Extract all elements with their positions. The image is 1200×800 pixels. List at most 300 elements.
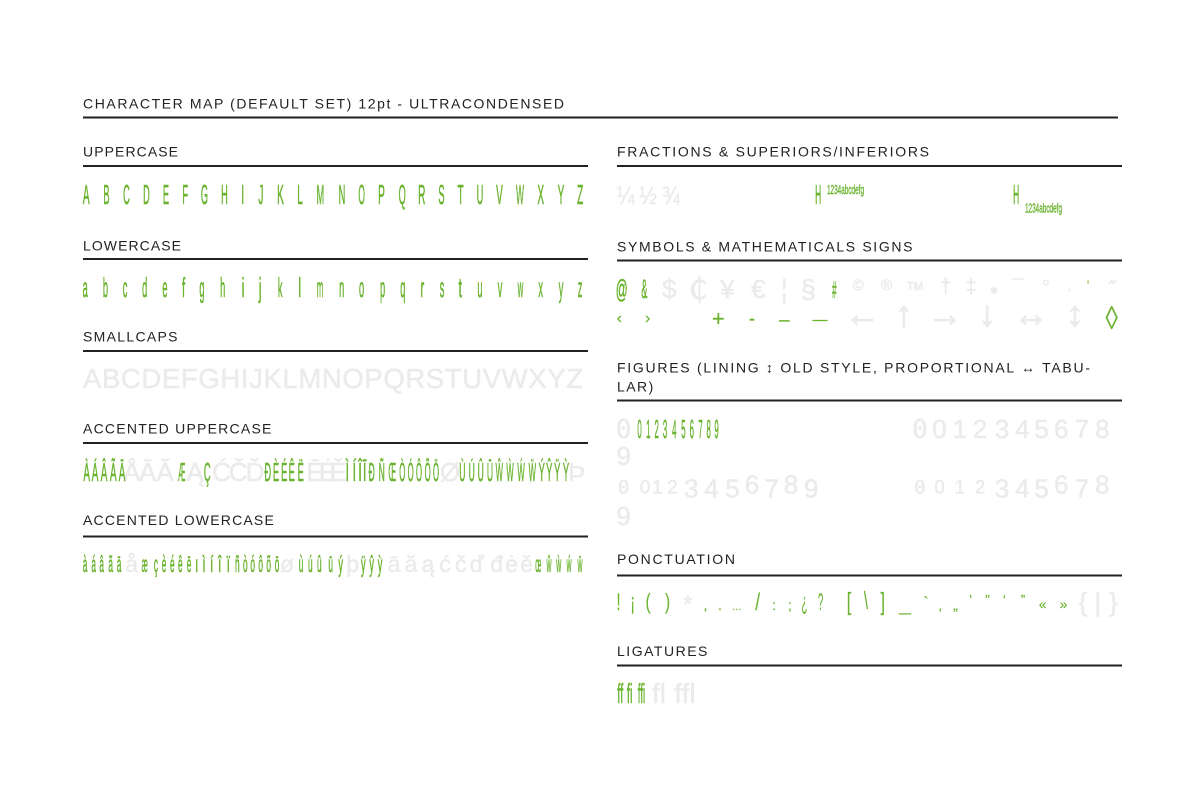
- green punctuation: `: [923, 595, 929, 612]
- green punctuation: ]: [881, 589, 885, 616]
- glyph row: lowercase: j: [258, 271, 262, 303]
- gray figures old style proportional: 4: [704, 474, 719, 504]
- green figures: 5: [681, 416, 686, 445]
- gray figures old style tabular: 7: [1075, 474, 1089, 504]
- green glyphs: accented uppercase: Ú: [469, 457, 475, 488]
- green punctuation: ¡: [630, 589, 635, 616]
- green glyphs: accented lowercase: ÿ: [361, 551, 366, 577]
- green superior sample: H: [815, 180, 821, 211]
- green punctuation: .: [718, 597, 722, 613]
- glyph row: uppercase: T: [458, 180, 464, 211]
- green glyphs: accented uppercase: Ó: [408, 458, 414, 488]
- glyph row: lowercase: p: [380, 273, 385, 304]
- green glyphs: accented uppercase: Ŵ: [496, 459, 503, 488]
- green glyphs: accented uppercase: Ī: [363, 458, 367, 487]
- gray ligatures: [652, 678, 696, 709]
- gray figures old style tabular: 6: [1054, 470, 1068, 500]
- glyph row: lowercase: n: [339, 273, 344, 304]
- green punctuation: »: [1060, 596, 1068, 612]
- green punctuation: (: [645, 590, 651, 615]
- glyph row: uppercase: U: [477, 180, 483, 211]
- heading: figures: FIGURES (LINING ↕ OLD STYLE, PROPORTIONAL ↔ TABU-: [617, 360, 1090, 376]
- gray symbols row 1: [662, 272, 1117, 307]
- gray glyphs: accented lowercase: ø: [280, 551, 294, 577]
- gray symbols row 1: °: [1042, 277, 1050, 299]
- green superior sample: [815, 180, 864, 211]
- panel: ligatures: [617, 643, 1122, 710]
- green superior sample: 1234abcdefg: [827, 183, 864, 197]
- gray figures lining tabular: 7: [1075, 414, 1089, 444]
- glyph row: uppercase: L: [297, 180, 303, 211]
- gray figures old style tabular: 5: [1034, 474, 1049, 504]
- gray glyphs: accented uppercase: Ā: [139, 457, 157, 487]
- glyph row: lowercase: m: [317, 272, 323, 304]
- gray symbols row 1: •: [990, 278, 998, 303]
- glyph row: uppercase: P: [378, 180, 385, 211]
- gray figures old style tabular: 0: [934, 478, 945, 498]
- green glyphs: accented lowercase: é: [170, 551, 175, 577]
- green glyphs: accented lowercase: á: [91, 551, 96, 577]
- heading: uppercase: UPPERCASE: [83, 144, 178, 160]
- green punctuation: :: [772, 597, 776, 613]
- glyph row: lowercase: q: [400, 273, 405, 304]
- green glyphs: accented lowercase: ẃ: [566, 552, 572, 577]
- gray fractions: ¾: [662, 181, 680, 209]
- green glyphs: accented uppercase: Î: [358, 458, 363, 487]
- glyph row: uppercase: V: [496, 180, 503, 211]
- green glyphs: accented uppercase: Ð: [369, 458, 375, 488]
- glyph row: lowercase: c: [123, 273, 127, 304]
- green ligatures: ffi: [638, 679, 645, 710]
- green glyphs: accented lowercase: ï: [227, 552, 230, 577]
- glyph row: lowercase: x: [538, 273, 543, 304]
- green glyphs: accented lowercase: í: [210, 552, 213, 577]
- gray figures old style proportional: 2: [667, 478, 678, 498]
- glyph row: uppercase: K: [277, 180, 284, 211]
- gray glyphs: accented uppercase: Ė: [319, 457, 336, 487]
- green glyphs: accented uppercase: Ù: [459, 457, 465, 488]
- green glyphs: accented uppercase: Ñ: [379, 455, 385, 488]
- panel: smallcaps: [83, 328, 588, 394]
- gray figures old style proportional: 7: [764, 474, 779, 504]
- glyph row: lowercase: h: [220, 273, 225, 304]
- green glyphs: accented uppercase: È: [273, 457, 279, 488]
- title: CHARACTER MAP (DEFAULT SET) 12pt - ULTRACONDENSED: [83, 96, 564, 112]
- green glyphs: accented uppercase: Á: [92, 457, 99, 488]
- green glyphs: accented uppercase: Ö: [433, 459, 439, 488]
- glyph row: uppercase: N: [339, 180, 345, 211]
- gray glyphs: accented lowercase: ć: [439, 551, 451, 577]
- green glyphs: accented lowercase: ẁ: [556, 552, 561, 577]
- glyph row: lowercase: y: [559, 273, 564, 304]
- green symbols row 1: &: [641, 275, 648, 305]
- green punctuation: ": [985, 592, 990, 607]
- gray glyphs: accented uppercase: Ć: [212, 457, 231, 487]
- green glyphs: accented uppercase: Ỳ: [563, 457, 569, 488]
- gray figures old style proportional: 5: [725, 474, 740, 504]
- green figures: 0: [637, 416, 642, 445]
- gray glyphs: accented lowercase: đ: [490, 551, 503, 577]
- gray figures lining proportional: 9: [616, 441, 631, 471]
- glyph row: uppercase: F: [182, 180, 188, 211]
- gray figures old style tabular: [914, 470, 1110, 504]
- green figures: 2: [655, 416, 659, 445]
- gray arrows: ↑: [895, 293, 913, 334]
- green glyphs: accented lowercase: ẅ: [577, 552, 583, 577]
- glyph row: uppercase: Y: [558, 180, 564, 211]
- green punctuation: ‘: [1003, 592, 1006, 607]
- glyph row: lowercase: [83, 271, 582, 304]
- gray glyphs: accented uppercase: Ē: [306, 457, 324, 487]
- heading: symbols: SYMBOLS & MATHEMATICALS SIGNS: [617, 238, 912, 254]
- gray glyphs: accented uppercase: Å: [123, 457, 141, 487]
- green figures: 6: [690, 416, 694, 445]
- green glyphs: accented lowercase: ū: [328, 551, 333, 577]
- gray figures old style tabular: 2: [975, 478, 985, 498]
- green punctuation: ‚: [939, 597, 942, 613]
- gray symbols row 1: ©: [853, 277, 864, 294]
- gray punctuation: |: [1094, 587, 1101, 617]
- green punctuation: /: [755, 589, 760, 616]
- green figures: [637, 416, 719, 445]
- green glyphs: accented uppercase: É: [281, 457, 287, 488]
- gray ligatures: fl: [652, 678, 666, 709]
- green glyphs: accented lowercase: è: [162, 551, 166, 577]
- gray figures lining tabular: 6: [1054, 414, 1068, 444]
- gray glyphs: accented lowercase: þ: [346, 551, 359, 577]
- gray arrows: [844, 293, 1084, 334]
- gray figures old style proportional: [616, 470, 818, 531]
- gray punctuation: *: [683, 591, 692, 618]
- green glyphs: accented uppercase: Ý: [539, 457, 545, 488]
- icon: lozenge: ◊: [1106, 301, 1118, 337]
- green punctuation: [616, 587, 1068, 616]
- green glyphs: accented lowercase: õ: [266, 551, 271, 577]
- green glyphs: accented lowercase: ō: [275, 551, 279, 577]
- green inferior sample: [1013, 180, 1062, 216]
- green symbols row 1: @: [616, 276, 628, 304]
- green symbols row 2: +: [712, 306, 725, 331]
- green glyphs: accented lowercase: œ: [535, 552, 541, 577]
- gray symbols row 1: §: [801, 275, 816, 304]
- gray figures old style proportional: 0: [618, 476, 629, 498]
- green glyphs: accented uppercase: Õ: [425, 458, 431, 488]
- gray figures lining tabular: 3: [995, 414, 1009, 444]
- gray glyphs: accented lowercase: ė: [505, 551, 518, 577]
- glyph row: lowercase: u: [477, 273, 482, 304]
- green glyphs: accented lowercase: ŷ: [369, 551, 374, 577]
- green glyphs: accented uppercase: Đ: [264, 458, 271, 488]
- glyph row: uppercase: D: [143, 180, 150, 211]
- gray figures lining tabular: 2: [973, 414, 987, 444]
- gray figures old style tabular: 1: [955, 478, 965, 498]
- gray figures old style proportional: 0: [640, 478, 650, 498]
- gray figures old style tabular: 4: [1015, 474, 1030, 504]
- green figures: 9: [714, 416, 719, 445]
- green glyphs: accented lowercase: û: [317, 551, 322, 577]
- gray glyphs: accented lowercase: ě: [520, 551, 533, 577]
- green figures: 7: [698, 416, 703, 445]
- green punctuation: \: [864, 587, 868, 615]
- glyph row: lowercase: o: [359, 273, 364, 304]
- green glyphs: accented uppercase: [83, 455, 569, 488]
- gray symbols row 1: ₵: [689, 272, 708, 307]
- green glyphs: accented uppercase: Ẁ: [506, 459, 514, 488]
- green punctuation: …: [732, 602, 742, 613]
- gray glyphs: accented uppercase: Þ: [568, 457, 585, 487]
- green punctuation: ;: [788, 597, 792, 613]
- glyph row: lowercase: a: [83, 273, 88, 304]
- gray glyphs: accented lowercase: č: [455, 551, 466, 577]
- green glyphs: accented lowercase: ó: [250, 551, 255, 577]
- green ligatures: [617, 678, 645, 710]
- green punctuation: ?: [818, 588, 823, 615]
- glyph row: uppercase: S: [438, 180, 444, 211]
- green punctuation: _: [898, 596, 911, 615]
- gray symbols row 1: ™: [906, 279, 924, 302]
- green glyphs: accented lowercase: ì: [202, 552, 206, 577]
- green glyphs: accented lowercase: ú: [308, 551, 313, 577]
- gray glyphs: accented lowercase: [125, 551, 533, 577]
- glyph row: lowercase: d: [142, 273, 147, 304]
- gray symbols row 1: ‡: [965, 276, 977, 298]
- gray glyphs: accented uppercase: Ø: [440, 457, 460, 487]
- gray symbols row 1: ¦: [781, 274, 788, 304]
- glyph row: uppercase: C: [123, 180, 130, 211]
- green glyphs: accented uppercase: Ì: [345, 458, 349, 487]
- green glyphs: accented uppercase: Ò: [399, 458, 405, 488]
- glyph row: lowercase: f: [182, 272, 185, 304]
- glyph row: uppercase: B: [103, 180, 110, 211]
- glyph row: uppercase: A: [83, 180, 90, 211]
- green glyphs: accented lowercase: ā: [117, 551, 121, 577]
- green punctuation: „: [953, 597, 958, 613]
- gray figures lining tabular: [912, 414, 1110, 445]
- green symbols row 2: –: [779, 310, 790, 331]
- green glyphs: accented uppercase: Œ: [388, 459, 396, 488]
- panel: figures: [616, 360, 1122, 531]
- green glyphs: accented uppercase: Â: [101, 457, 108, 488]
- gray figures old style tabular: 8: [1095, 470, 1110, 500]
- gray arrows: ↓: [978, 293, 996, 334]
- glyph row: uppercase: Q: [399, 180, 406, 211]
- glyph row: uppercase: H: [221, 180, 228, 211]
- green glyphs: accented uppercase: Æ: [178, 459, 185, 488]
- green symbols row 2: —: [812, 312, 828, 328]
- gray figures lining tabular: 1: [953, 414, 967, 444]
- green glyphs: accented lowercase: ı: [195, 552, 198, 577]
- gray symbols row 1: †: [940, 276, 951, 298]
- green punctuation: !: [616, 589, 621, 616]
- gray glyphs: accented uppercase: Ă: [156, 457, 174, 487]
- gray glyphs: accented uppercase: Č: [229, 457, 248, 487]
- gray symbols row 1: €: [751, 274, 766, 304]
- glyph row: uppercase: X: [537, 180, 544, 211]
- gray figures lining tabular: 8: [1095, 414, 1110, 444]
- green glyphs: accented lowercase: ê: [178, 551, 183, 577]
- gray fractions: ¼: [617, 181, 635, 209]
- gray ligatures: ffl: [674, 678, 696, 709]
- gray figures old style proportional: 8: [784, 470, 798, 500]
- heading: lowercase: LOWERCASE: [83, 238, 181, 254]
- green glyphs: accented uppercase: Ÿ: [554, 458, 560, 488]
- panel: ponctuation: [616, 551, 1122, 618]
- gray glyphs: accented uppercase: Ě: [329, 457, 347, 487]
- panel: accented lowercase: [83, 512, 588, 577]
- green ligatures: ff: [617, 678, 623, 710]
- gray glyphs: accented lowercase: ă: [405, 551, 418, 577]
- glyph row: uppercase: R: [418, 180, 425, 211]
- glyph row: lowercase: z: [578, 273, 582, 304]
- green glyphs: accented uppercase: Í: [352, 458, 356, 487]
- green glyphs: accented uppercase: Ë: [298, 458, 304, 488]
- green symbols row 1: #: [832, 277, 837, 303]
- green symbols row 1: ': [1087, 279, 1089, 294]
- gray figures old style proportional: 6: [745, 470, 759, 500]
- heading: accented lowercase: ACCENTED LOWERCASE: [83, 512, 274, 528]
- gray punctuation: [683, 587, 1118, 618]
- gray symbols row 1: ¥: [719, 274, 735, 304]
- green glyphs: accented uppercase: Ç: [204, 458, 211, 488]
- gray fractions: ½: [639, 181, 657, 209]
- glyph row: lowercase: v: [498, 273, 503, 304]
- glyph row: uppercase: I: [241, 179, 244, 211]
- glyph row: lowercase: b: [103, 273, 108, 304]
- gray figures old style proportional: 9: [804, 474, 818, 504]
- heading: figures: LAR): [617, 378, 653, 394]
- green inferior sample: 1234abcdefg: [1025, 202, 1062, 216]
- green glyphs: accented lowercase: ỳ: [378, 551, 382, 577]
- glyph row: uppercase: M: [317, 180, 324, 211]
- gray symbols row 1: .: [1067, 278, 1071, 294]
- heading: fractions: FRACTIONS & SUPERIORS/INFERIORS: [617, 144, 929, 160]
- heading: smallcaps: SMALLCAPS: [83, 328, 178, 344]
- green glyphs: accented uppercase: Ê: [289, 457, 295, 488]
- heading: figures: [617, 360, 1122, 402]
- gray symbols row 1: ˝: [1108, 277, 1117, 302]
- green figures: 4: [672, 416, 677, 445]
- green glyphs: accented lowercase: ý: [338, 551, 343, 577]
- gray figures old style tabular: 0: [914, 476, 926, 498]
- glyph row: lowercase: g: [199, 273, 205, 304]
- gray arrows: ←: [844, 293, 880, 334]
- green glyphs: accented uppercase: Ã: [110, 456, 117, 488]
- green glyphs: accented uppercase: Ā: [119, 457, 126, 488]
- green figures: 3: [663, 416, 667, 445]
- green glyphs: accented lowercase: ù: [299, 551, 303, 577]
- panel: lowercase: [83, 238, 588, 304]
- gray figures lining tabular: 4: [1015, 414, 1030, 444]
- green glyphs: accented lowercase: ò: [243, 551, 248, 577]
- gray figures lining tabular: 0: [932, 414, 947, 444]
- green symbols row 2: -: [749, 307, 755, 330]
- heading: ponctuation: PONCTUATION: [617, 551, 735, 567]
- gray figures lining tabular: 5: [1034, 414, 1049, 444]
- green glyphs: accented lowercase: ē: [187, 551, 191, 577]
- green glyphs: accented lowercase: î: [217, 552, 222, 577]
- glyph row: uppercase: E: [163, 180, 169, 211]
- green glyphs: accented uppercase: Ẅ: [529, 459, 536, 488]
- gray symbols row 1: ¯: [1012, 277, 1025, 299]
- gray glyphs: accented lowercase: ą: [422, 551, 435, 577]
- gray fractions: [617, 181, 680, 209]
- green glyphs: accented lowercase: ã: [108, 551, 113, 577]
- green figures: 1: [646, 416, 650, 445]
- glyph row: smallcaps: ABCDEFGHIJKLMNOPQRSTUVWXYZ: [83, 363, 583, 394]
- green glyphs: accented lowercase: æ: [142, 552, 148, 577]
- gray arrows: ↔: [1013, 293, 1049, 334]
- glyph row: uppercase: O: [358, 180, 365, 211]
- panel: uppercase: [83, 144, 588, 211]
- green glyphs: accented lowercase: â: [99, 551, 104, 577]
- gray figures lining tabular: 0: [912, 415, 928, 445]
- gray glyphs: accented uppercase: Ą: [186, 457, 204, 487]
- glyph row: lowercase: l: [298, 271, 301, 303]
- gray glyphs: accented lowercase: ď: [470, 551, 485, 577]
- green glyphs: accented lowercase: [83, 551, 583, 577]
- green glyphs: accented uppercase: Ẃ: [517, 459, 525, 488]
- green symbols row 2: ›: [645, 310, 650, 327]
- panel: accented uppercase: [83, 420, 588, 488]
- glyph row: uppercase: Z: [577, 180, 583, 211]
- green punctuation: ”: [1021, 592, 1025, 607]
- gray figures lining proportional: [616, 415, 631, 471]
- glyph row: lowercase: e: [162, 273, 168, 304]
- green glyphs: accented uppercase: Ū: [487, 457, 493, 488]
- glyph row: lowercase: r: [421, 272, 424, 304]
- gray arrows: →: [927, 293, 963, 334]
- gray figures old style proportional: 1: [652, 478, 663, 498]
- green glyphs: accented lowercase: ŵ: [546, 552, 552, 577]
- glyph row: uppercase: W: [516, 180, 524, 211]
- gray glyphs: accented lowercase: å: [125, 551, 138, 577]
- glyph row: lowercase: w: [517, 272, 523, 304]
- green glyphs: accented lowercase: ç: [154, 551, 158, 577]
- gray symbols row 1: ®: [881, 277, 892, 294]
- glyph row: lowercase: s: [440, 273, 444, 304]
- panel: fractions and superiors/inferiors: [617, 144, 1122, 216]
- gray glyphs: accented lowercase: ā: [388, 551, 401, 577]
- gray glyphs: accented uppercase: Ď: [246, 457, 264, 487]
- green punctuation: ): [665, 590, 670, 615]
- glyph row: lowercase: t: [459, 271, 462, 303]
- gray figures lining proportional: 0: [616, 415, 631, 445]
- green symbols row 1: [616, 275, 1089, 305]
- green punctuation: [: [847, 589, 851, 616]
- green glyphs: accented uppercase: Ô: [416, 458, 422, 488]
- glyph row: uppercase: J: [258, 180, 263, 211]
- gray arrows: ↕: [1066, 293, 1084, 334]
- green punctuation: ¿: [801, 588, 807, 615]
- glyph row: lowercase: k: [278, 273, 283, 304]
- gray symbols row 1: $: [662, 274, 677, 304]
- gray glyphs: accented uppercase: [123, 457, 585, 487]
- gray figures old style proportional: 9: [616, 501, 631, 531]
- gray figures old style proportional: 3: [684, 474, 698, 504]
- glyph row: uppercase: [83, 179, 583, 211]
- gray figures old style tabular: 3: [995, 474, 1009, 504]
- green glyphs: accented lowercase: à: [83, 551, 87, 577]
- green figures: 8: [707, 416, 711, 445]
- green glyphs: accented uppercase: À: [83, 457, 90, 488]
- green glyphs: accented lowercase: ô: [258, 551, 263, 577]
- green ligatures: fi: [627, 678, 632, 710]
- gray punctuation: }: [1109, 587, 1118, 617]
- green punctuation: ,: [703, 597, 707, 613]
- glyph row: lowercase: i: [242, 271, 244, 303]
- green punctuation: «: [1039, 596, 1047, 612]
- green glyphs: accented lowercase: ñ: [235, 551, 240, 577]
